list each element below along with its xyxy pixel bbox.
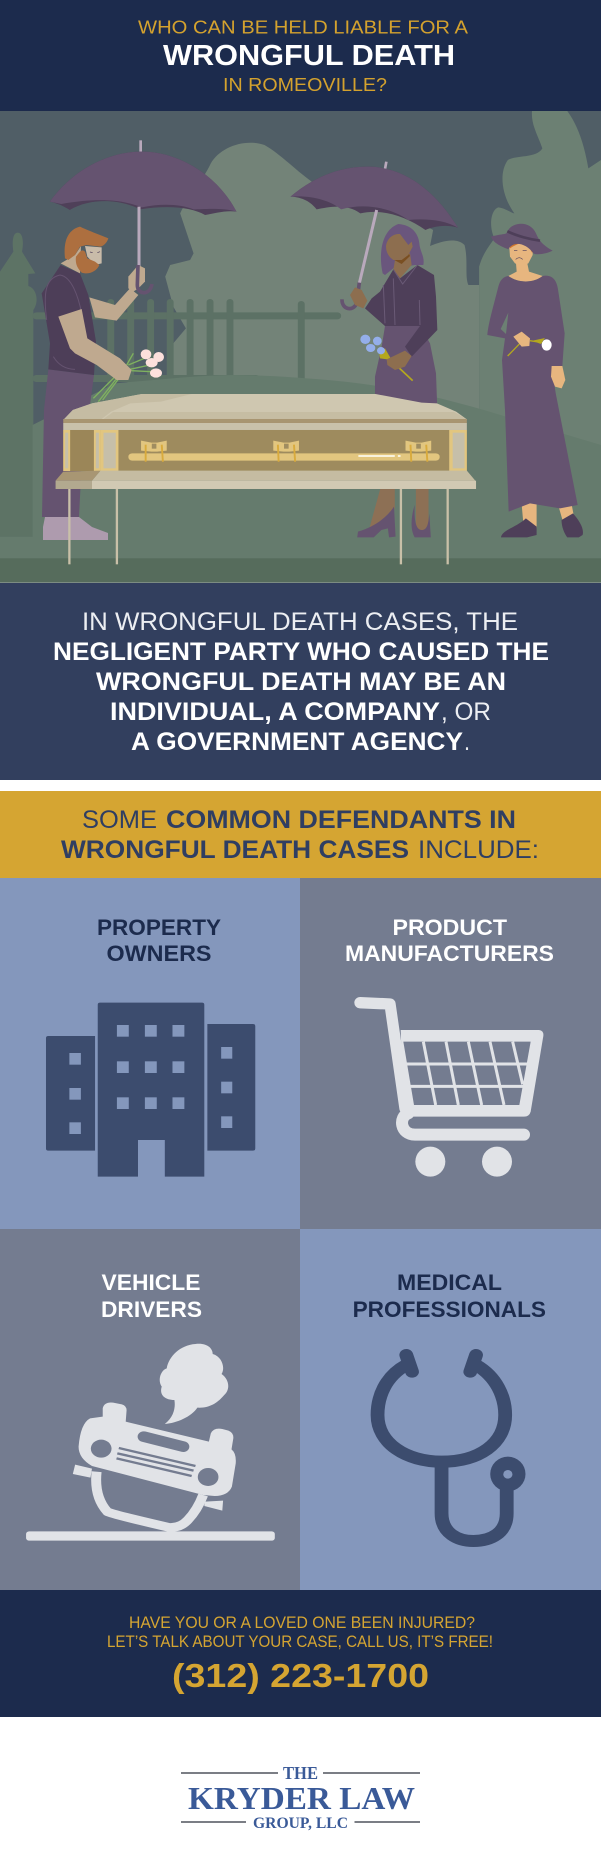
person: woman with umbrella (291, 167, 458, 410)
label (353, 1270, 546, 1322)
call to action text (107, 1614, 493, 1651)
umbrella handle (137, 265, 152, 293)
lower arm (58, 309, 132, 380)
white flower (508, 338, 552, 356)
title: WRONGFUL DEATH (163, 40, 455, 72)
label: MEDICAL (397, 1270, 502, 1295)
hair (381, 224, 424, 275)
panel: product manufacturers (300, 878, 601, 1229)
neck (61, 246, 81, 273)
face details (514, 251, 527, 259)
heading text: INCLUDE: (418, 836, 539, 864)
icon: stethoscope (378, 1355, 525, 1541)
label (101, 1270, 202, 1322)
hair (510, 240, 534, 253)
illustration: funeral scene (0, 111, 601, 583)
scene background (0, 111, 601, 583)
neck (393, 253, 412, 278)
title: WHO CAN BE HELD LIABLE FOR A (138, 16, 469, 38)
person: man (42, 207, 164, 540)
coffin (56, 394, 476, 564)
person: woman in hat (487, 224, 578, 512)
panel: title band (0, 0, 601, 111)
pants (42, 369, 94, 517)
hat (491, 224, 553, 254)
umbrella tip: woman (385, 162, 386, 170)
panel: defendants heading (0, 791, 601, 878)
logo: The Kryder Law Group: KRYDER LAW (188, 1780, 415, 1816)
heading text (61, 806, 539, 864)
icon: overturned car (26, 1344, 275, 1541)
logo: The Kryder Law Group (181, 1763, 420, 1832)
label: DRIVERS (101, 1297, 202, 1322)
label: MANUFACTURERS (345, 941, 554, 966)
logo: The Kryder Law Group: THE (283, 1763, 318, 1783)
torso (42, 265, 96, 375)
label (345, 915, 554, 966)
skirt (375, 325, 437, 410)
neck and chest (508, 263, 543, 281)
intro text: , OR (441, 698, 491, 726)
face details (90, 252, 100, 253)
heading text: WRONGFUL DEATH CASES (61, 836, 409, 864)
panel: call to action (0, 1590, 601, 1717)
legs: woman in hat (501, 500, 583, 537)
umbrella handle (342, 283, 359, 309)
title (138, 16, 469, 95)
intro text: . (464, 728, 470, 756)
icon: office buildings (46, 1003, 255, 1177)
call to action text: HAVE YOU OR A LOVED ONE BEEN INJURED? (129, 1614, 475, 1632)
dress (487, 276, 578, 512)
beard (76, 250, 99, 273)
label (97, 915, 221, 966)
umbrella shaft (134, 207, 143, 266)
intro text: WRONGFUL DEATH MAY BE AN (96, 668, 506, 696)
label: PRODUCT (392, 915, 508, 940)
label: OWNERS (106, 941, 212, 966)
face (509, 243, 533, 266)
raised arm (89, 288, 138, 321)
upper hand (350, 287, 367, 308)
umbrella shaft (359, 210, 377, 283)
panel: vehicle drivers (0, 1229, 300, 1590)
icon: shopping cart (360, 1003, 543, 1177)
face (85, 246, 102, 265)
intro text: NEGLIGENT PARTY WHO CAUSED THE (53, 638, 549, 666)
jacket (365, 265, 437, 357)
heading text: COMMON DEFENDANTS IN (166, 806, 516, 834)
blue flowers (360, 335, 413, 381)
phone number: (312) 223-1700 (172, 1658, 429, 1695)
flower stems (93, 353, 152, 402)
shoes (43, 517, 108, 540)
arm gap (501, 313, 508, 334)
heading text: SOME (82, 806, 157, 834)
intro text: IN WRONGFUL DEATH CASES, THE (82, 608, 518, 636)
panel: property owners (0, 878, 300, 1229)
panel: medical professionals (300, 1229, 601, 1590)
lower hand (387, 351, 412, 370)
holding hand (513, 332, 530, 347)
panel: intro statement (0, 583, 601, 780)
title: IN ROMEOVILLE? (223, 74, 387, 95)
umbrella: man (50, 140, 236, 215)
face (386, 234, 413, 260)
label: VEHICLE (102, 1270, 200, 1295)
intro text: INDIVIDUAL, A COMPANY (110, 698, 440, 726)
hair (65, 227, 108, 260)
intro text: A GOVERNMENT AGENCY (131, 728, 463, 756)
logo: The Kryder Law Group: GROUP, LLC (253, 1815, 348, 1832)
hand (551, 366, 565, 388)
legs: woman with umbrella (357, 489, 431, 537)
label: PROFESSIONALS (353, 1297, 546, 1322)
label: PROPERTY (97, 915, 221, 940)
intro text (53, 608, 549, 756)
call to action text: LET’S TALK ABOUT YOUR CASE, CALL US, IT’S FREE! (107, 1633, 493, 1651)
umbrella canopy (291, 167, 458, 230)
flowers (141, 349, 164, 378)
